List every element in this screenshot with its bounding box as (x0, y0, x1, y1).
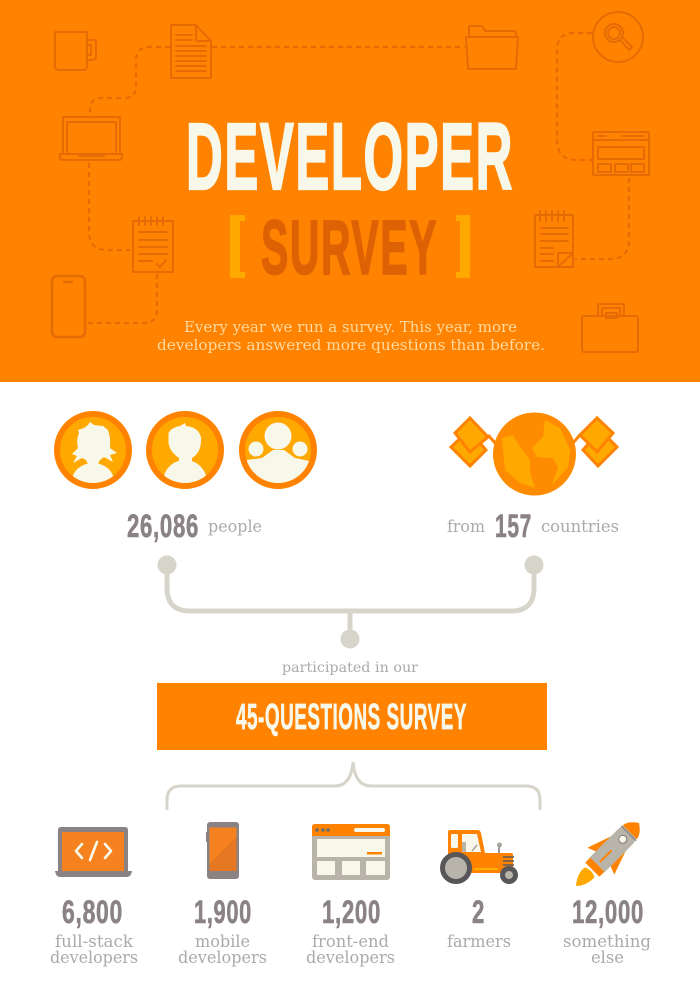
category: something else: else (591, 948, 624, 967)
countries count: countries (541, 517, 619, 536)
category: something else: 12,000 (572, 894, 644, 930)
category: full-stack developers: 6,800 (62, 894, 123, 930)
survey banner: 45-QUESTIONS SURVEY (236, 696, 467, 737)
icon: briefcase (582, 304, 638, 352)
category: full-stack developers: full-stack (55, 932, 134, 951)
survey banner (157, 683, 547, 750)
countries count: from (447, 517, 485, 536)
icon: browser window (312, 824, 390, 880)
countries count: 157 (495, 508, 532, 544)
category: front-end developers: developers (306, 948, 395, 967)
icon: rocket (563, 810, 652, 899)
category: something else (563, 810, 652, 967)
icon: laptop with code (55, 827, 132, 877)
icon: magnifier circle (593, 12, 643, 62)
category: full-stack developers: developers (50, 948, 138, 967)
subtitle with brackets: SURVEY (261, 205, 438, 291)
icon: checklist notepad (133, 217, 173, 272)
icon: document (171, 25, 211, 78)
icon: laptop (60, 117, 122, 160)
countries count (447, 508, 619, 544)
icon: person with short hair (149, 414, 221, 504)
category: mobile developers: 1,900 (194, 894, 252, 930)
category: farmers (442, 830, 516, 951)
category: front-end developers: 1,200 (322, 894, 381, 930)
category: farmers: farmers (447, 932, 511, 951)
category: mobile developers: developers (178, 948, 267, 967)
category: front-end developers: front-end (312, 932, 389, 951)
category: something else: something (563, 932, 651, 951)
icon: smartphone (206, 822, 239, 879)
intro text (157, 318, 545, 354)
icon: browser window (593, 132, 649, 175)
people count: people (208, 517, 262, 536)
icon: group of people (242, 414, 314, 490)
category: mobile developers (178, 822, 267, 967)
connector bracket (158, 556, 544, 648)
icon: notes with corner (535, 211, 573, 267)
intro text: developers answered more questions than before. (157, 336, 545, 354)
category bracket (167, 762, 540, 810)
dashed connector lines (87, 33, 629, 323)
icon: mug (55, 32, 96, 70)
category: full-stack developers (50, 827, 138, 967)
icon: smartphone (52, 276, 85, 337)
icon: tractor (442, 830, 516, 882)
people count: 26,086 (127, 508, 199, 544)
category: farmers: 2 (472, 894, 485, 930)
icon: globe with flags (451, 412, 617, 496)
category: mobile developers: mobile (195, 932, 250, 951)
icon: folder (466, 26, 518, 69)
subtitle with brackets (230, 205, 470, 291)
category: front-end developers (306, 824, 395, 967)
participated label: participated in our (282, 660, 418, 676)
panel: header (0, 0, 700, 382)
intro text: Every year we run a survey. This year, more (184, 318, 517, 336)
icon: person with long hair (57, 414, 129, 499)
